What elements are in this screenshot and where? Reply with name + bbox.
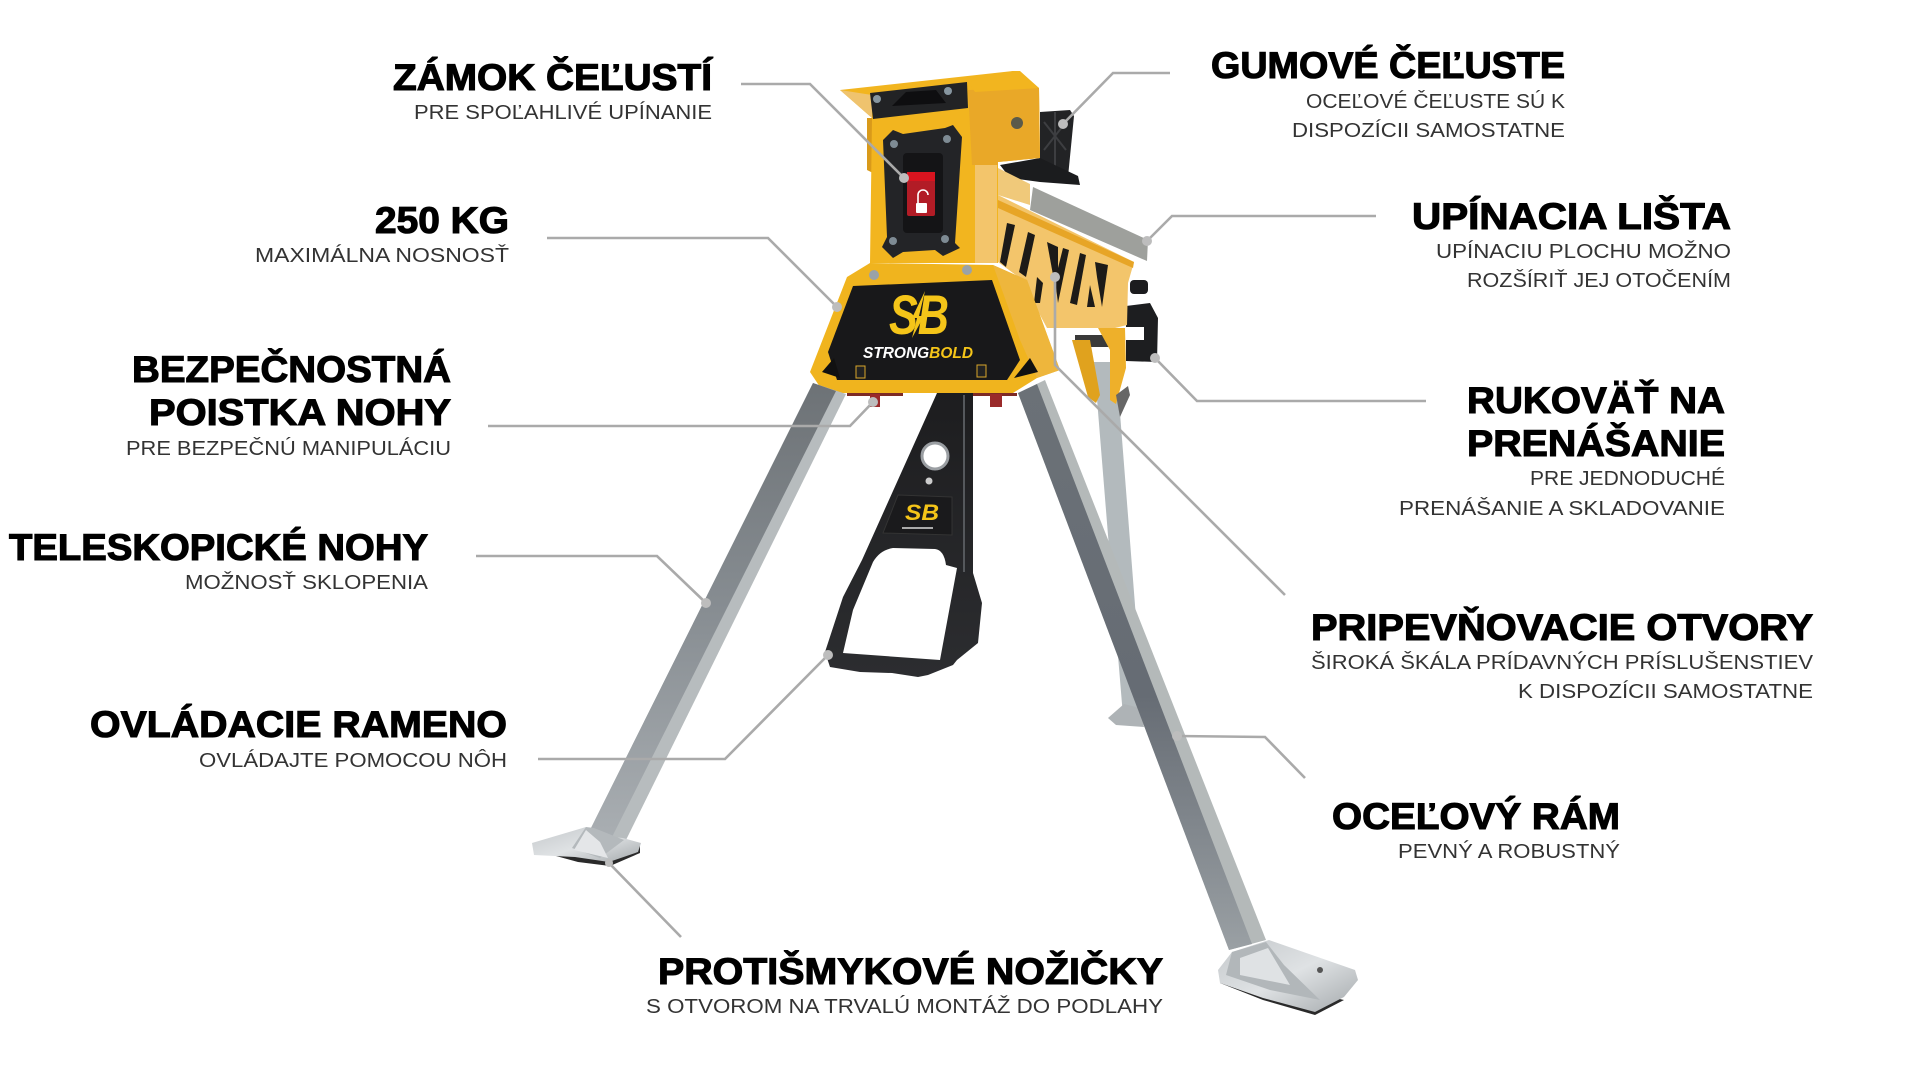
right foot bbox=[1218, 940, 1358, 1015]
label: mounting holes: ŠIROKÁ ŠKÁLA PRÍDAVNÝCH PRÍSLUŠENSTIEV bbox=[1311, 651, 1814, 674]
label: jaw lock bbox=[393, 56, 714, 124]
label: rubber jaws: DISPOZÍCII SAMOSTATNE bbox=[1292, 119, 1565, 142]
label: control arm bbox=[90, 704, 507, 772]
label: steel frame bbox=[1332, 796, 1620, 863]
logo: SB: SB bbox=[889, 283, 949, 346]
icon: red lock switch bbox=[907, 172, 935, 216]
label: steel frame: OCEĽOVÝ RÁM bbox=[1332, 796, 1620, 837]
product: workbench stand bbox=[532, 71, 1358, 1015]
rear leg bbox=[1094, 362, 1144, 727]
base housing bbox=[810, 263, 1060, 393]
label: clamping rail: UPÍNACIU PLOCHU MOŽNO bbox=[1436, 240, 1731, 263]
brand name: STRONGBOLD bbox=[863, 345, 973, 362]
label: mounting holes bbox=[1311, 606, 1814, 703]
label: carrying handle bbox=[1399, 379, 1725, 520]
logo panel bbox=[828, 280, 1020, 380]
label: mounting holes: PRIPEVŇOVACIE OTVORY bbox=[1311, 606, 1813, 648]
label: anti-slip feet bbox=[646, 950, 1163, 1018]
label: leg safety lock: BEZPEČNOSTNÁ bbox=[132, 348, 451, 390]
label: mounting holes: K DISPOZÍCII SAMOSTATNE bbox=[1518, 680, 1813, 703]
callout lines and dots bbox=[476, 73, 1426, 937]
rear rubber jaw bbox=[998, 110, 1080, 205]
label: control arm: OVLÁDACIE RAMENO bbox=[90, 704, 507, 745]
label: carrying handle: PRE JEDNODUCHÉ bbox=[1530, 467, 1725, 490]
label: control arm: OVLÁDAJTE POMOCOU NÔH bbox=[199, 749, 507, 772]
side beam bbox=[998, 195, 1134, 328]
front rubber jaw bbox=[870, 82, 968, 119]
carrying handle bbox=[1112, 280, 1158, 362]
label: carrying handle: RUKOVÄŤ NA bbox=[1467, 379, 1725, 421]
label: telescopic legs: MOŽNOSŤ SKLOPENIA bbox=[185, 571, 429, 594]
label: rubber jaws: GUMOVÉ ČEĽUSTE bbox=[1211, 44, 1565, 86]
label: carrying handle: PRENÁŠANIE bbox=[1467, 422, 1725, 464]
label: anti-slip feet: S OTVOROM NA TRVALÚ MONTÁŽ DO PODLAHY bbox=[646, 995, 1163, 1018]
foot pedal arm bbox=[825, 393, 982, 677]
label: 250 kg: MAXIMÁLNA NOSNOSŤ bbox=[255, 244, 509, 267]
label: rubber jaws: OCEĽOVÉ ČEĽUSTE SÚ K bbox=[1306, 90, 1566, 113]
label: leg safety lock: PRE BEZPEČNÚ MANIPULÁCIU bbox=[126, 437, 451, 460]
label: rubber jaws bbox=[1211, 44, 1566, 142]
left foot bbox=[532, 827, 641, 866]
label: 250 kg: 250 KG bbox=[375, 200, 509, 241]
label: anti-slip feet: PROTIŠMYKOVÉ NOŽIČKY bbox=[658, 950, 1163, 992]
label: clamping rail: UPÍNACIA LIŠTA bbox=[1412, 195, 1731, 237]
label: telescopic legs: TELESKOPICKÉ NOHY bbox=[9, 527, 428, 568]
label: leg safety lock bbox=[126, 348, 451, 460]
label: steel frame: PEVNÝ A ROBUSTNÝ bbox=[1398, 840, 1620, 863]
clamping rail bbox=[1030, 187, 1148, 261]
label: 250 kg bbox=[255, 200, 509, 267]
left front leg bbox=[590, 383, 846, 842]
leg safety locks bbox=[847, 393, 1017, 407]
jaw lock plate bbox=[882, 125, 962, 258]
label: carrying handle: PRENÁŠANIE A SKLADOVANIE bbox=[1399, 497, 1725, 520]
label: clamping rail bbox=[1412, 195, 1731, 292]
top plate and column bbox=[840, 71, 1040, 263]
label: jaw lock: PRE SPOĽAHLIVÉ UPÍNANIE bbox=[414, 101, 712, 124]
lower crossbar bbox=[1075, 335, 1125, 347]
brackets under rail bbox=[1072, 328, 1130, 417]
label: leg safety lock: POISTKA NOHY bbox=[149, 392, 451, 433]
right front leg bbox=[1018, 380, 1266, 950]
small logo: SB bbox=[905, 500, 939, 525]
label: clamping rail: ROZŠÍRIŤ JEJ OTOČENÍM bbox=[1467, 269, 1731, 292]
label: jaw lock: ZÁMOK ČEĽUSTÍ bbox=[393, 56, 714, 98]
label: telescopic legs bbox=[9, 527, 429, 594]
